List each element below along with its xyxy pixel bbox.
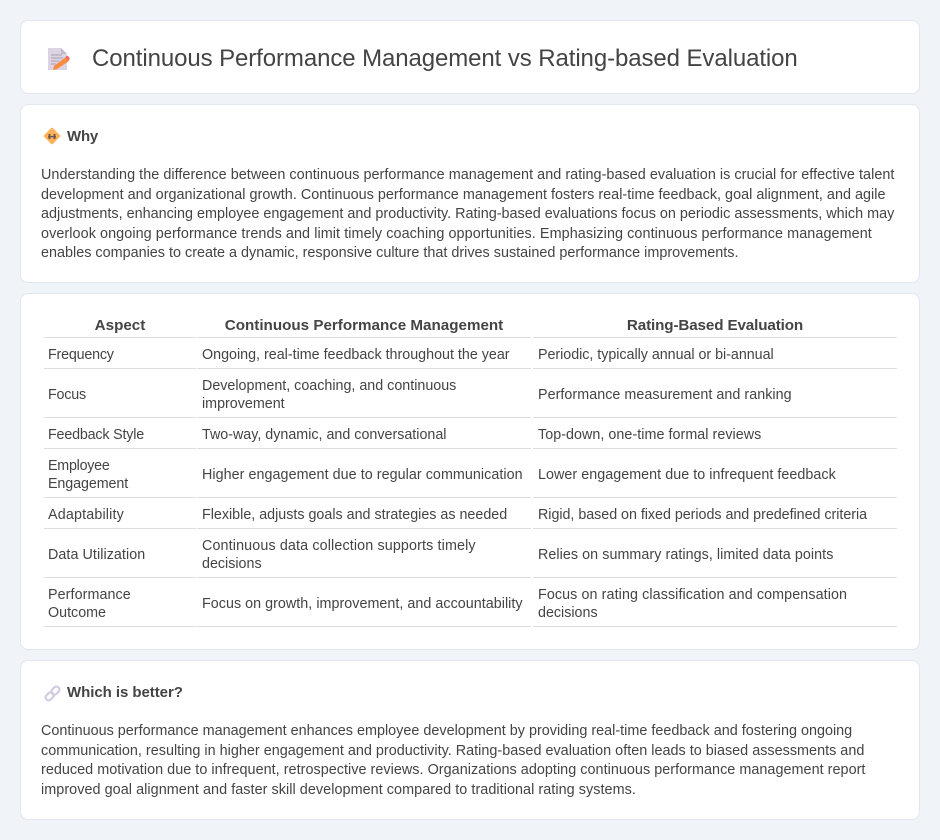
row: feedback style <box>44 427 897 449</box>
text block: which is better paragraph: reduced motivation due to infrequent, retrospective reviews. Organizations adopting continuous performance management report <box>41 762 865 778</box>
text block: which is better paragraph: improved goal alignment and faster skill development compared to traditional rating systems. <box>41 782 636 798</box>
row: performance outcome: Outcome <box>48 605 106 621</box>
row: feedback style: Top-down, one-time formal reviews <box>538 427 761 443</box>
row: focus: improvement <box>202 396 285 412</box>
text block: why paragraph: Understanding the difference between continuous performance management and rating-based evaluation is crucial for effective talent <box>41 167 894 183</box>
row: performance outcome: decisions <box>538 605 598 621</box>
icon: document with pencil <box>48 48 70 70</box>
text block: why paragraph: overlook ongoing performance trends and limit timely coaching opportunities. Emphasizing continuous performance management <box>41 226 872 242</box>
panel: title header <box>20 20 920 94</box>
heading: which is better: Which is better? <box>67 684 183 701</box>
row: focus <box>44 378 897 418</box>
row: adaptability: Flexible, adjusts goals and strategies as needed <box>202 507 507 523</box>
row: feedback style: Two-way, dynamic, and conversational <box>202 427 446 443</box>
table header row: Aspect <box>95 317 145 334</box>
row: performance outcome: Focus on rating classification and compensation <box>538 587 847 603</box>
panel: comparison table <box>20 293 920 650</box>
row: focus: Focus <box>48 387 86 403</box>
text block: why paragraph <box>41 167 894 261</box>
row: employee engagement: Engagement <box>48 476 128 492</box>
row: data utilization: decisions <box>202 556 262 572</box>
panel: why <box>20 104 920 283</box>
table header row: Continuous Performance Management <box>225 317 503 334</box>
row: performance outcome: Focus on growth, improvement, and accountability <box>202 596 523 612</box>
row: frequency <box>44 347 897 369</box>
title: Continuous Performance Management vs Rating-based Evaluation <box>92 45 798 72</box>
row: employee engagement: Employee <box>48 458 110 474</box>
icon: warning diamond <box>44 128 60 144</box>
icon: chain link <box>44 686 60 702</box>
text block: why paragraph: development and organizational growth. Continuous performance management fosters real-time feedback, goal alignment, and agile <box>41 186 886 202</box>
row: adaptability: Rigid, based on fixed periods and predefined criteria <box>538 507 867 523</box>
text block: which is better paragraph: communication, resulting in higher engagement and productivity. Rating-based evaluation often leads to biased assessments and <box>41 742 864 758</box>
text block: which is better paragraph <box>41 723 866 798</box>
row: frequency: Ongoing, real-time feedback throughout the year <box>202 347 510 363</box>
row: frequency: Frequency <box>48 347 114 363</box>
row: employee engagement <box>44 458 897 498</box>
row: performance outcome <box>44 587 897 627</box>
row: performance outcome: Performance <box>48 587 131 603</box>
row: frequency: Periodic, typically annual or bi-annual <box>538 347 774 363</box>
panel: which is better <box>20 660 920 820</box>
row: focus: Development, coaching, and continuous <box>202 378 456 394</box>
row: data utilization <box>44 538 897 578</box>
text block: which is better paragraph: Continuous performance management enhances employee development by providing real-time feedback and fostering ongoing <box>41 723 852 739</box>
text block: why paragraph: adjustments, enhancing employee engagement and productivity. Rating-based evaluations focus on periodic assessments, which may <box>41 206 894 222</box>
row: employee engagement: Lower engagement due to infrequent feedback <box>538 467 836 483</box>
row: adaptability <box>44 507 897 529</box>
row: data utilization: Continuous data collection supports timely <box>202 538 476 554</box>
row: data utilization: Relies on summary ratings, limited data points <box>538 547 833 563</box>
row: employee engagement: Higher engagement due to regular communication <box>202 467 523 483</box>
table header row <box>44 317 897 338</box>
text block: why paragraph: enables companies to create a dynamic, responsive culture that drives sustained performance improvements. <box>41 245 738 261</box>
heading: why: Why <box>67 128 98 145</box>
row: adaptability: Adaptability <box>48 507 124 523</box>
table header row: Rating-Based Evaluation <box>627 317 803 334</box>
row: focus: Performance measurement and ranking <box>538 387 792 403</box>
row: feedback style: Feedback Style <box>48 427 144 443</box>
row: data utilization: Data Utilization <box>48 547 145 563</box>
